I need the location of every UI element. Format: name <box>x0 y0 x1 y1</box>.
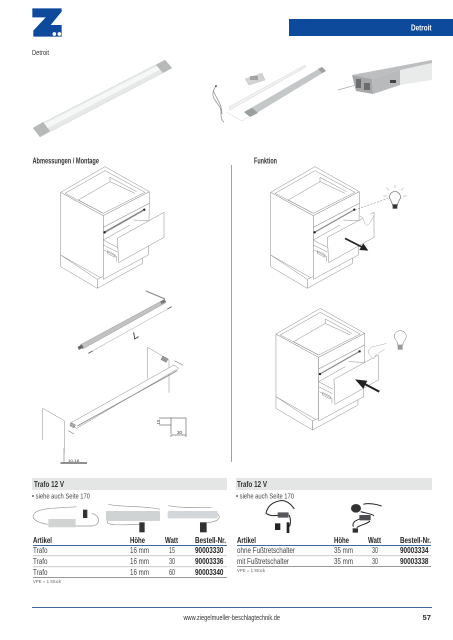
panel: right transformer <box>236 478 432 574</box>
table: left: Bestell-Nr. <box>195 535 226 545</box>
table: left: Trafo <box>33 556 48 566</box>
table: right: 90003334 <box>400 545 429 555</box>
subtitle: Detroit <box>32 48 50 57</box>
section detail with dimensions: 30 <box>177 430 182 435</box>
heading: dimensions and mounting: Abmessungen / Montage <box>32 156 99 166</box>
footer: www.ziegelmueller-beschlagtechnik.de <box>183 613 280 622</box>
table: right: Höhe <box>334 535 349 545</box>
icon: unlit bulb <box>394 331 406 350</box>
table: right: 30 <box>372 545 378 555</box>
cabinet drawing: drawer opened <box>271 167 388 288</box>
table: left: 15 <box>169 545 175 555</box>
heading band: left: Trafo 12 V <box>34 479 64 489</box>
table: left: Trafo <box>33 567 48 577</box>
table: left: 30 <box>169 556 175 566</box>
product photo: kit parts <box>213 65 326 122</box>
table: right: mit Fußtretschalter <box>237 556 289 566</box>
product photos: power supplies <box>266 501 382 533</box>
header bar <box>289 19 453 36</box>
table: left: 16 mm <box>130 545 149 555</box>
icon: lit bulb <box>383 185 407 209</box>
table: left: Watt <box>165 535 178 545</box>
footer <box>32 607 432 622</box>
cabinet drawing: mounting <box>61 167 164 288</box>
table: left: 16 mm <box>130 567 149 577</box>
table: left: Trafo <box>33 545 48 555</box>
rail stub above <box>146 291 165 299</box>
section detail with dimensions: 15 <box>156 419 161 425</box>
table: right: 30 <box>372 556 378 566</box>
wall bottom with dimension 10-18 <box>60 448 87 463</box>
table: left: Artikel <box>33 535 52 545</box>
mounted rail between side panels <box>43 347 183 453</box>
note: right: • siehe auch Seite 170 <box>236 494 294 500</box>
table: left: 90003330 <box>195 545 224 555</box>
heading band: right: Trafo 12 V <box>237 479 267 489</box>
table: right: Artikel <box>237 535 256 545</box>
table: right: ohne Fußtretschalter <box>237 545 295 555</box>
table: left <box>33 535 227 585</box>
table: left: 90003336 <box>195 556 224 566</box>
panel: left transformer <box>32 478 227 585</box>
cabinet drawing: drawer closed <box>276 308 387 430</box>
wall bottom with dimension 10-18: 10-18 <box>68 458 80 463</box>
product photos: transformers <box>33 504 219 532</box>
section detail with dimensions <box>156 418 186 437</box>
table: right: Watt <box>368 535 381 545</box>
table: left: Höhe <box>130 535 145 545</box>
table: left: 60 <box>169 567 175 577</box>
product photo: close-up end cap <box>338 60 432 94</box>
table: right: 90003338 <box>400 556 429 566</box>
table: right <box>237 535 431 574</box>
note: left: • siehe auch Seite 170 <box>32 494 90 500</box>
table: left: VPE = 1 Stück <box>33 579 62 585</box>
heading: function: Funktion <box>254 156 277 166</box>
LED rail with length dimension <box>77 299 172 353</box>
table: right: Bestell-Nr. <box>400 535 431 545</box>
logo <box>32 8 62 37</box>
divider <box>231 165 232 462</box>
table: right: 35 mm <box>334 545 353 555</box>
table: right: 35 mm <box>334 556 353 566</box>
footer: 57 <box>423 613 431 622</box>
table: left: 16 mm <box>130 556 149 566</box>
table: right: VPE = 1 Stück <box>237 568 266 574</box>
table: left: 90003340 <box>195 567 224 577</box>
heading band: right <box>236 478 432 490</box>
product photo: LED bar <box>33 60 172 137</box>
header bar: Detroit <box>411 24 432 32</box>
heading band: left <box>32 478 227 490</box>
